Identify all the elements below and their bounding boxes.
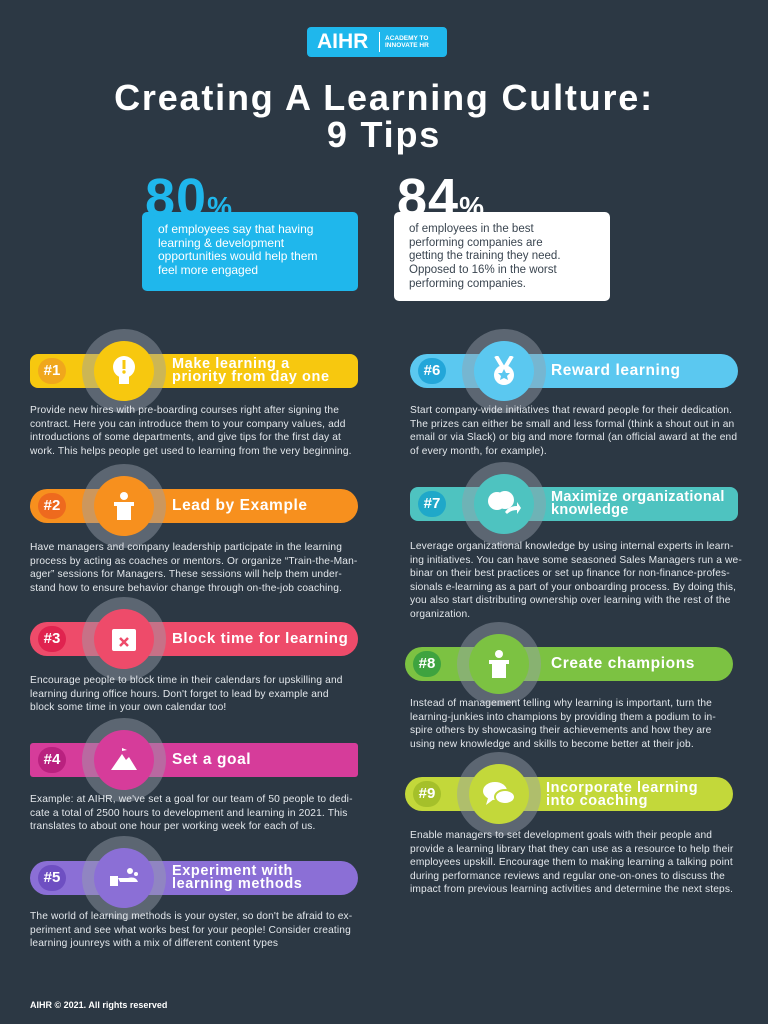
- tip 9: into coaching: [546, 793, 648, 809]
- text 7: ing initiatives. You can have some seasoned Sales Managers run a we-: [410, 555, 742, 566]
- text 5: periment and see what works best for your people! Consider creating: [30, 925, 351, 936]
- text 7: sionals e-learning as a part of your onboarding process. By doing this,: [410, 582, 736, 593]
- text 6: email or via Slack) or big and more formal (an official award at the end: [410, 432, 737, 443]
- tip 7: #7: [424, 495, 440, 512]
- stat 80%: [142, 168, 358, 291]
- text 9: during performance reviews and regular one-on-ones to discuss the: [410, 871, 725, 882]
- text 8: [410, 698, 716, 750]
- text 2: stand how to ensure behavior change through on-the-job coaching.: [30, 583, 342, 594]
- text 4: [30, 794, 353, 832]
- tip 1: Make learning a: [172, 356, 290, 372]
- stat 84%: 84%: [397, 168, 485, 228]
- title: Creating A Learning Culture:: [114, 77, 654, 118]
- tip 4: Set a goal: [172, 751, 251, 768]
- stat 84%: Opposed to 16% in the worst: [409, 264, 557, 276]
- tip 9: #9: [419, 785, 435, 802]
- tip 7: [410, 487, 738, 521]
- text 6: [410, 405, 737, 457]
- text 3: learning during office hours. Don't forget to lead by example and: [30, 689, 329, 700]
- tip 3: [30, 622, 358, 656]
- tip 1: priority from day one: [172, 369, 330, 385]
- tip 6: Reward learning: [551, 362, 681, 379]
- stat 84%: performing companies.: [409, 278, 526, 290]
- text 4: cate a total of 2500 hours to development and learning in 2021. This: [30, 808, 348, 819]
- text 6: Start company-wide initiatives that reward people for their dedication.: [410, 405, 732, 416]
- text 8: learning-junkies into champions by providing them a podium to in-: [410, 712, 716, 723]
- text 1: work. This helps people get used to learning from the very beginning.: [30, 446, 352, 457]
- text 6: The prizes can either be small and less formal (think a shout out in an: [410, 419, 734, 430]
- text 5: [30, 911, 352, 949]
- title: 9 Tips: [327, 114, 441, 155]
- text 3: block some time in your own calendar too!: [30, 702, 226, 713]
- tip 4: #4: [44, 751, 60, 768]
- tip 3: #3: [44, 630, 60, 647]
- text 7: binar on their best practices or set up finance for non-finance-profes-: [410, 568, 730, 579]
- tip 7: Maximize organizational: [551, 489, 725, 505]
- tip 8: [405, 647, 733, 681]
- text 8: Instead of management telling why learning is important, turn the: [410, 698, 712, 709]
- footer: AIHR © 2021. All rights reserved: [30, 1000, 167, 1010]
- tip 3: Block time for learning: [172, 630, 348, 647]
- stat 84%: of employees in the best: [409, 223, 534, 235]
- stat 84%: performing companies are: [409, 237, 543, 249]
- text 4: translates to about one hour per working week for each of us.: [30, 821, 316, 832]
- tip 5: Experiment with: [172, 863, 293, 879]
- stat 84%: [394, 168, 610, 301]
- tip 2: #2: [44, 497, 60, 514]
- text 7: [410, 541, 742, 620]
- logo: INNOVATE HR: [385, 42, 429, 49]
- title: [114, 77, 654, 155]
- text 2: [30, 542, 357, 594]
- text 2: ager” sessions for Managers. These sessions will help them under-: [30, 569, 342, 580]
- text 9: [410, 830, 734, 895]
- stat 80%: of employees say that having: [158, 222, 313, 236]
- stat 80%: 80%: [145, 168, 233, 228]
- tip 7: knowledge: [551, 502, 629, 518]
- text 7: Leverage organizational knowledge by using internal experts in learn-: [410, 541, 734, 552]
- text 5: The world of learning methods is your oyster, so don't be afraid to ex-: [30, 911, 352, 922]
- text 9: provide a learning library that they can use as a resource to help their: [410, 844, 733, 855]
- text 7: organization.: [410, 609, 470, 620]
- tip 5: #5: [44, 869, 60, 886]
- text 1: contract. Here you can introduce them to your company values, add: [30, 419, 346, 430]
- tip 1: [30, 354, 358, 388]
- text 9: impact from previous learning activities and determine the next steps.: [410, 884, 733, 895]
- text 2: Have managers and company leadership participate in the learning: [30, 542, 342, 553]
- tip 1: #1: [44, 362, 60, 379]
- text 1: introductions of some departments, and give tips for the first day at: [30, 432, 341, 443]
- logo: ACADEMY TO: [385, 35, 428, 42]
- tip 9: Incorporate learning: [546, 780, 698, 796]
- tip 9: [405, 777, 733, 811]
- text 9: employees upskill. Encourage them to making learning a talking point: [410, 857, 733, 868]
- text 1: Provide new hires with pre-boarding courses right after signing the: [30, 405, 339, 416]
- tip 8: #8: [419, 655, 435, 672]
- text 8: spire others by showcasing their achievements and how they are: [410, 725, 712, 736]
- tip 5: learning methods: [172, 876, 302, 892]
- text 6: of every month, for example).: [410, 446, 547, 457]
- tip 6: #6: [424, 362, 440, 379]
- tip 6: [410, 354, 738, 388]
- tip 8: Create champions: [551, 655, 695, 672]
- text 7: you also start distributing ownership over learning with the rest of the: [410, 595, 731, 606]
- stat 80%: learning & development: [158, 236, 284, 250]
- text 4: Example: at AIHR, we've set a goal for our team of 50 people to dedi-: [30, 794, 353, 805]
- tip 5: [30, 861, 358, 895]
- text 3: Encourage people to block time in their calendars for upskilling and: [30, 675, 343, 686]
- logo: [307, 27, 447, 57]
- text 8: using new knowledge and skills to become better at their job.: [410, 739, 694, 750]
- stat 80%: opportunities would help them: [158, 249, 317, 263]
- tip 4: [30, 743, 358, 777]
- logo: AIHR: [317, 30, 368, 53]
- tip 2: Lead by Example: [172, 497, 308, 514]
- text 1: [30, 405, 352, 457]
- text 9: Enable managers to set development goals with their people and: [410, 830, 712, 841]
- tip 2: [30, 489, 358, 523]
- text 5: learning jounreys with a mix of different content types: [30, 938, 278, 949]
- text 3: [30, 675, 343, 713]
- text 2: process by acting as coaches or mentors. Or organize “Train-the-Man-: [30, 556, 357, 567]
- stat 84%: getting the training they need.: [409, 250, 561, 262]
- stat 80%: feel more engaged: [158, 262, 258, 276]
